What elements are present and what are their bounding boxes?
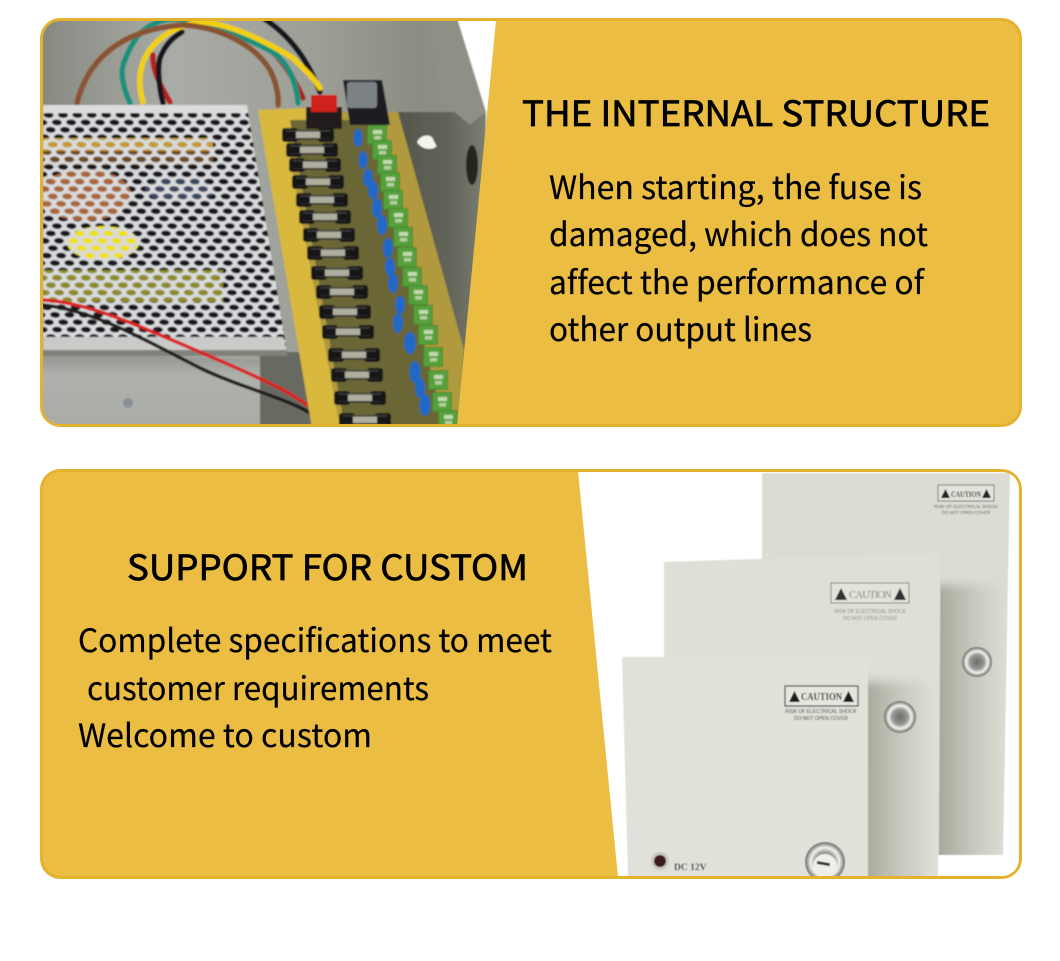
photo: three enclosures: [570, 470, 1022, 902]
small enclosure: DO NOT OPEN COVER: [794, 716, 848, 722]
small enclosure: DC 12V: [674, 863, 707, 873]
photo: power supply interior: [38, 18, 498, 430]
heading: the internal structure: THE INTERNAL STRUCTURE: [522, 86, 990, 137]
heading: support for custom: SUPPORT FOR CUSTOM: [127, 540, 528, 591]
panel: support for custom: [42, 470, 1022, 902]
large enclosure: RISK OF ELECTRICAL SHOCK: [934, 504, 998, 509]
enclosure holes: [417, 136, 478, 185]
panel: internal structure: [38, 18, 1020, 430]
large enclosure: CAUTION: [951, 490, 981, 499]
fuses: [282, 128, 391, 427]
perforated mesh cover: [39, 103, 288, 353]
red rocker switch: [306, 95, 342, 129]
fuse holder: [343, 80, 390, 125]
blue capacitors: [354, 129, 430, 416]
large enclosure: [762, 473, 1010, 875]
green terminals: [368, 126, 458, 430]
medium enclosure: [664, 553, 940, 902]
red and black leads: [43, 297, 310, 415]
medium enclosure: CAUTION: [849, 589, 892, 601]
text block: custom description: customer requirements: [87, 664, 429, 710]
text block: fuse description: other output lines: [549, 305, 812, 351]
medium enclosure: DO NOT OPEN COVER: [843, 616, 897, 622]
text block: fuse description: When starting, the fuse is: [549, 163, 922, 209]
text block: fuse description: [549, 163, 928, 351]
panel background: [42, 470, 1020, 878]
small enclosure: CAUTION: [801, 692, 843, 703]
text block: custom description: Welcome to custom: [78, 711, 372, 757]
text block: fuse description: affect the performance of: [549, 258, 926, 304]
circuit board: [286, 111, 464, 422]
text block: custom description: [78, 616, 552, 757]
large enclosure: DO NOT OPEN COVER: [942, 510, 991, 515]
small enclosure: [622, 657, 868, 882]
small enclosure: RISK OF ELECTRICAL SHOCK: [785, 709, 857, 715]
panel background: [42, 20, 1020, 426]
text block: custom description: Complete specifications to meet: [78, 616, 552, 662]
medium enclosure: RISK OF ELECTRICAL SHOCK: [834, 609, 906, 615]
text block: fuse description: damaged, which does not: [549, 210, 928, 256]
wires: [77, 18, 320, 105]
